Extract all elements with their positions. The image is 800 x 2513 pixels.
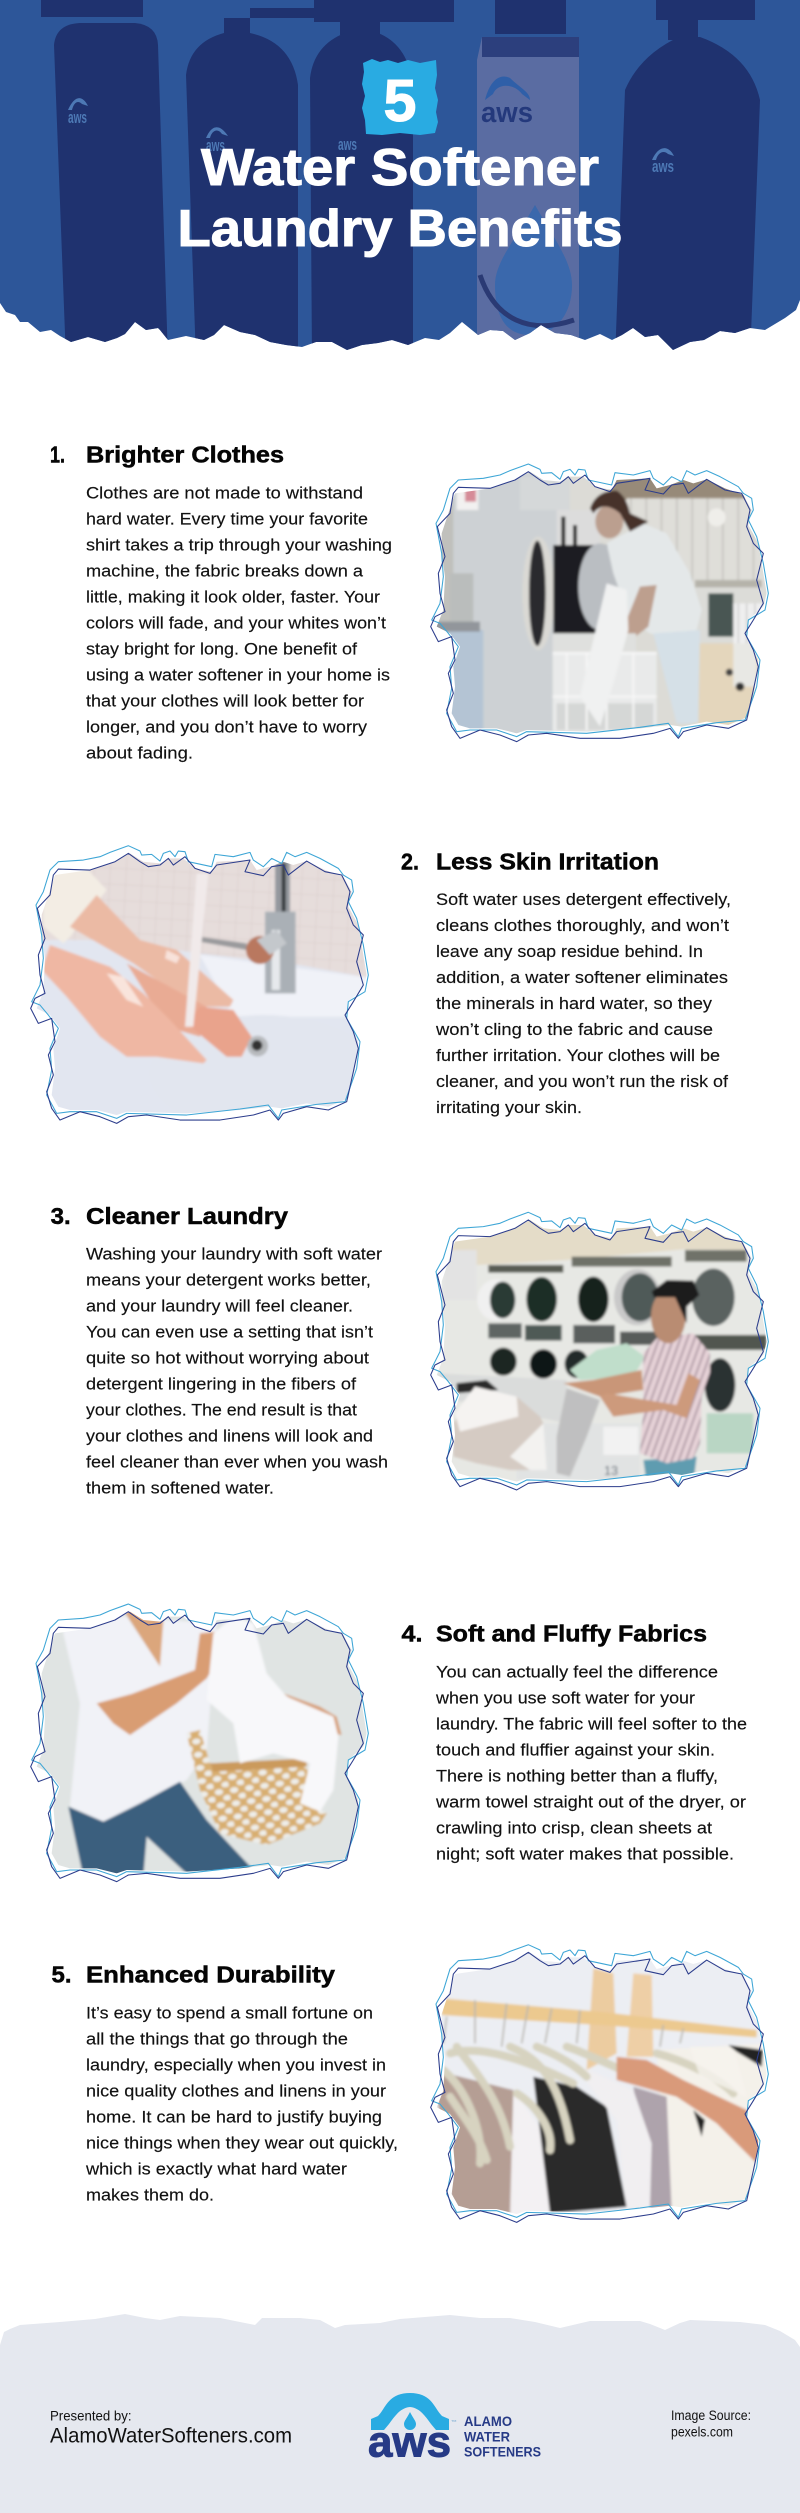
body text 2: the minerals in hard water, so they (436, 994, 713, 1013)
body text 4: touch and fluffier against your skin. (436, 1740, 715, 1759)
photo frame lines (31, 846, 368, 1123)
heading 5: 5. (52, 1962, 72, 1988)
image source: pexels.com (671, 2425, 733, 2440)
photo 3: woman at laundromat: 13 (604, 1464, 618, 1478)
body text 5: all the things that go through the (86, 2029, 348, 2048)
photo frame lines (431, 464, 768, 742)
photo frame lines (431, 1212, 768, 1490)
title: Laundry Benefits (178, 200, 622, 258)
body text 4 (435, 1662, 747, 1863)
image source: Image Source: (671, 2408, 751, 2423)
photo 1: woman unloading dryer (430, 464, 769, 742)
heading 3: 3. (51, 1203, 71, 1229)
header banner (0, 0, 800, 360)
body text 4: You can actually feel the difference (436, 1662, 718, 1681)
body text 1: stay bright for long. One benefit of (86, 639, 357, 658)
tank logo: fifth tank: aws (652, 157, 674, 176)
tank logo: second tank: aws (206, 136, 225, 155)
body text 5: laundry, especially when you invest in (86, 2055, 386, 2074)
photo frame lines (31, 1604, 368, 1882)
heading 1: Brighter Clothes (86, 442, 284, 468)
body text 2: addition, a water softener eliminates (436, 968, 728, 987)
photo frame lines (431, 1945, 768, 2222)
body text 4: There is nothing better than a fluffy, (436, 1766, 718, 1785)
footer torn background (0, 2314, 800, 2513)
photo 2: hands washing under tap (30, 845, 369, 1124)
body text 3: Washing your laundry with soft water (86, 1244, 382, 1263)
title: Water Softener (201, 139, 599, 197)
body text 3 (86, 1244, 388, 1497)
heading 4: 4. (402, 1621, 422, 1647)
heading 2: 2. (401, 848, 419, 874)
logo: Alamo Water Softeners: ALAMO (464, 2413, 512, 2429)
logo: Alamo Water Softeners: SOFTENERS (464, 2444, 541, 2460)
logo: Alamo Water Softeners: ™ (451, 2419, 457, 2426)
logo: Alamo Water Softeners (368, 2393, 541, 2467)
body text 1: hard water. Every time your favorite (86, 509, 368, 528)
body text 3: and your laundry will feel cleaner. (86, 1296, 353, 1315)
body text 1: Clothes are not made to withstand (86, 483, 363, 502)
heading 1: 1. (50, 442, 65, 468)
heading 4: Soft and Fluffy Fabrics (436, 1621, 707, 1647)
photo 3: woman at laundromat (430, 1212, 769, 1490)
body text 3: quite so hot without worrying about (86, 1348, 369, 1367)
photo 4: person holding laundry basket (30, 1604, 369, 1882)
section 4: soft and fluffy fabrics (20, 1590, 747, 1890)
body text 1: machine, the fabric breaks down a (86, 561, 364, 580)
body text 2: won’t cling to the fabric and cause (435, 1020, 713, 1039)
presented by: Presented by: (50, 2408, 132, 2424)
body text 5: It’s easy to spend a small fortune on (86, 2003, 373, 2022)
body text 1: little, making it look older, faster. Your (86, 587, 380, 606)
body text 3: your clothes and linens will look and (86, 1426, 373, 1445)
body text 5: which is exactly what hard water (85, 2159, 347, 2178)
presented by (50, 2408, 292, 2448)
tank logo: centre canister: aws (481, 97, 533, 129)
body text 2: irritating your skin. (436, 1098, 582, 1117)
body text 5 (85, 2003, 398, 2204)
body text 2: cleans clothes thoroughly, and won’t (436, 916, 729, 935)
body text 1: colors will fade, and your whites won’t (86, 613, 386, 632)
section 3: cleaner laundry (51, 1203, 787, 1497)
number badge: 5 (384, 68, 416, 134)
body text 1 (86, 483, 392, 762)
body text 5: home. It can be hard to justify buying (86, 2107, 382, 2126)
body text 1: that your clothes will look better for (86, 691, 364, 710)
logo: Alamo Water Softeners: WATER (464, 2429, 510, 2445)
body text 1: longer, and you don’t have to worry (86, 717, 368, 736)
body text 3: your clothes. The end result is that (86, 1400, 357, 1419)
body text 2: Soft water uses detergent effectively, (436, 890, 731, 909)
title (178, 139, 622, 258)
light centre canister (477, 37, 579, 360)
body text 2: leave any soap residue behind. In (436, 942, 703, 961)
number badge (362, 59, 438, 135)
section 1: brighter clothes (50, 442, 787, 762)
body text 3: means your detergent works better, (86, 1270, 371, 1289)
body text 5: nice quality clothes and linens in your (86, 2081, 386, 2100)
presented by: AlamoWaterSofteners.com (50, 2425, 292, 2448)
image source (671, 2408, 751, 2440)
body text 3: feel cleaner than ever when you wash (86, 1452, 388, 1471)
logo: Alamo Water Softeners: aws (368, 2418, 451, 2467)
section 2: less skin irritation (20, 843, 731, 1132)
body text 2: further irritation. Your clothes will be (436, 1046, 720, 1065)
tank logo: third tank: aws (338, 135, 357, 154)
body text 3: You can even use a setting that isn’t (86, 1322, 373, 1341)
body text 3: detergent lingering in the fibers of (86, 1374, 356, 1393)
tank logo: first tank: aws (68, 108, 87, 127)
photo 5: clothes on hangers (430, 1944, 769, 2223)
heading 2: Less Skin Irritation (436, 848, 659, 874)
body text 3: them in softened water. (86, 1478, 274, 1497)
body text 5: nice things when they wear out quickly, (86, 2133, 398, 2152)
heading 3: Cleaner Laundry (86, 1203, 288, 1229)
body text 2 (435, 890, 731, 1117)
heading 5: Enhanced Durability (86, 1962, 335, 1988)
body text 4: warm towel straight out of the dryer, or (435, 1792, 746, 1811)
body text 2: cleaner, and you won’t run the risk of (436, 1072, 728, 1091)
body text 1: shirt takes a trip through your washing (86, 535, 392, 554)
body text 4: night; soft water makes that possible. (436, 1844, 734, 1863)
body text 4: crawling into crisp, clean sheets at (436, 1818, 712, 1837)
body text 4: when you use soft water for your (435, 1688, 695, 1707)
body text 4: laundry. The fabric will feel softer to the (436, 1714, 747, 1733)
header photo: water softener tanks (0, 0, 800, 360)
body text 1: about fading. (86, 743, 193, 762)
body text 1: using a water softener in your home is (86, 665, 390, 684)
body text 5: makes them do. (86, 2185, 214, 2204)
section 5: enhanced durability (52, 1930, 787, 2230)
footer (0, 2314, 800, 2513)
